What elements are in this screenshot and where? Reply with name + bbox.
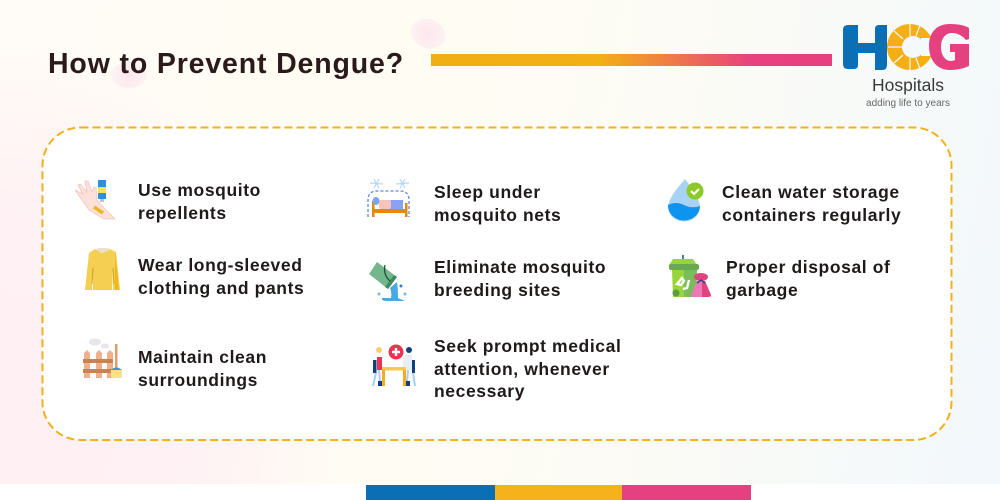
header gradient bar <box>431 54 832 66</box>
text: maintain clean surroundings: surroundings <box>138 370 258 390</box>
icon: doctor consultation <box>372 344 416 386</box>
text: use mosquito repellents: repellents <box>138 202 227 222</box>
text: seek medical attention: Seek prompt medical <box>434 336 621 356</box>
logo: HCG Hospitals: Hospitals <box>872 75 944 95</box>
icon: clean fence with broom <box>83 338 122 378</box>
text: sleep under mosquito nets: mosquito nets <box>434 204 561 224</box>
text: use mosquito repellents: Use mosquito <box>138 180 261 200</box>
text: proper disposal of garbage: garbage <box>726 280 798 300</box>
icon: garbage bin and bag <box>669 255 711 297</box>
text: wear long-sleeved clothing: Wear long-sleeved <box>138 255 303 275</box>
text: maintain clean surroundings <box>138 347 267 390</box>
text: seek medical attention: attention, whenever <box>434 358 610 378</box>
text: seek medical attention: necessary <box>434 381 525 401</box>
icon: repellent on arm <box>74 180 116 220</box>
text: eliminate breeding sites <box>434 257 606 300</box>
logo: HCG Hospitals <box>843 24 969 109</box>
text: proper disposal of garbage: Proper disposal of <box>726 257 890 277</box>
text: seek medical attention <box>434 336 621 401</box>
title: How to Prevent Dengue? <box>48 48 404 80</box>
text: eliminate breeding sites: Eliminate mosquito <box>434 257 606 277</box>
text: wear long-sleeved clothing <box>138 255 304 298</box>
text: clean water storage: containers regularly <box>722 204 901 224</box>
text: maintain clean surroundings: Maintain clean <box>138 347 267 367</box>
text: wear long-sleeved clothing: clothing and pants <box>138 278 304 298</box>
text: clean water storage <box>722 182 901 224</box>
text: eliminate breeding sites: breeding sites <box>434 280 561 300</box>
text: clean water storage: Clean water storage <box>722 182 900 202</box>
footer colour bar <box>366 485 751 500</box>
icon: tipping bucket of water <box>369 262 406 301</box>
icon: bed under net <box>367 178 410 217</box>
text: sleep under mosquito nets <box>434 182 561 224</box>
text: sleep under mosquito nets: Sleep under <box>434 182 541 202</box>
text: proper disposal of garbage <box>726 257 890 300</box>
icon: long-sleeved sweater <box>85 248 120 290</box>
logo: HCG Hospitals: adding life to years <box>866 98 950 109</box>
icon: water drop with check <box>668 179 704 222</box>
text: use mosquito repellents <box>138 180 261 222</box>
